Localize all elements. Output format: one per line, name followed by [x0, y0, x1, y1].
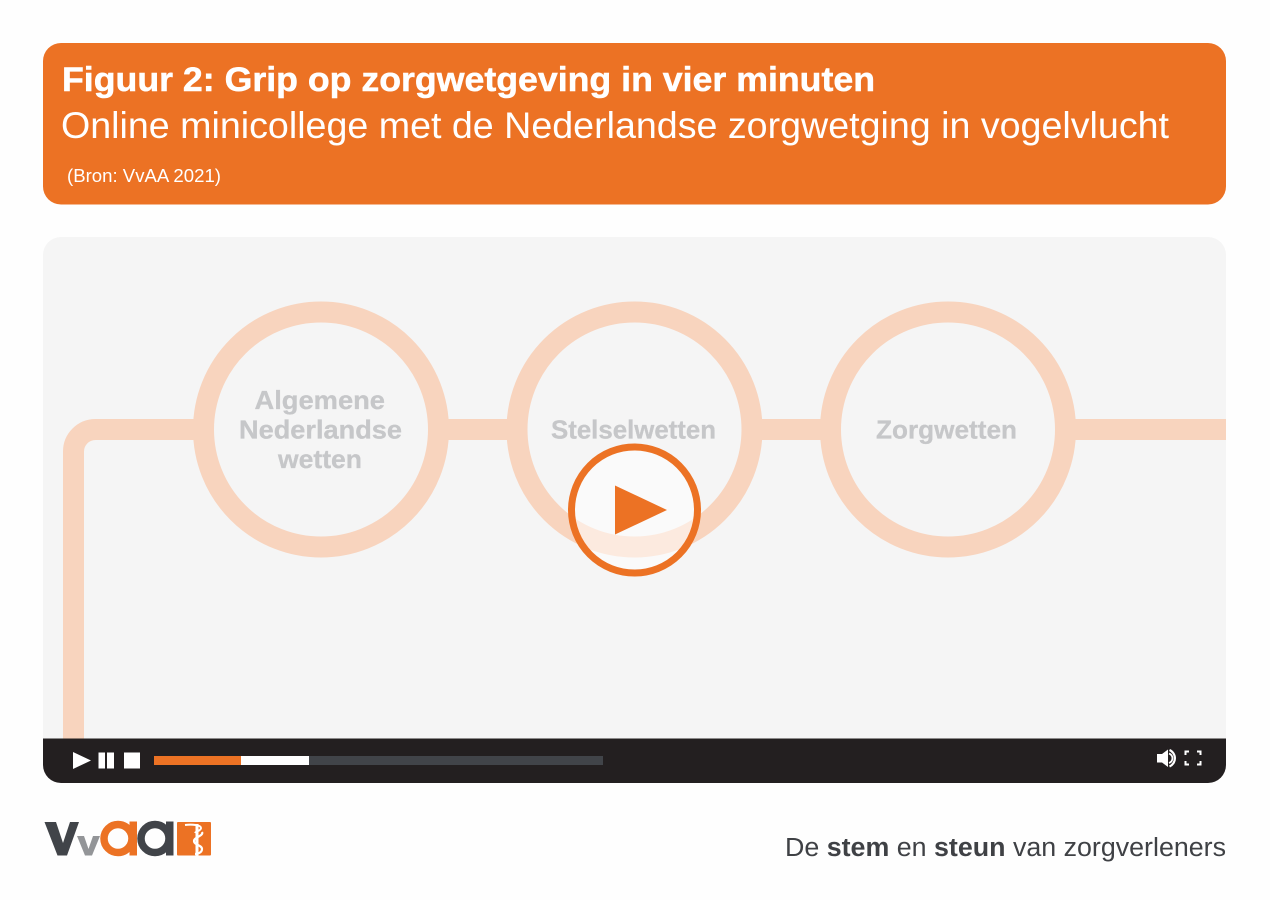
circle: Zorgwetten [830, 312, 1066, 547]
subtitle: Online minicollege met de Nederlandse zorgwetging in vogelvlucht [61, 105, 1170, 146]
title: Figuur 2: Grip op zorgwetgeving in vier minuten [62, 61, 875, 99]
logo: VvAA [44, 822, 211, 856]
icon: pause [98, 752, 114, 768]
icon: volume [1157, 750, 1175, 767]
header panel [43, 43, 1226, 204]
circle: Algemene Nederlandse wetten [204, 312, 438, 547]
icon: play triangle [615, 486, 667, 534]
progress bar [154, 756, 603, 765]
logo mark [177, 822, 211, 856]
circle: Stelselwetten: Stelselwetten [551, 414, 716, 444]
play button [572, 447, 698, 573]
icon: play [73, 752, 91, 769]
timeline line [74, 430, 1226, 739]
circle: Stelselwetten [517, 312, 752, 547]
circle: Algemene Nederlandse wetten: wetten [277, 444, 362, 474]
icon: fullscreen [1186, 752, 1200, 764]
icon: stop [124, 752, 140, 768]
video control bar [43, 738, 1226, 783]
circle: Algemene Nederlandse wetten: Nederlandse [239, 414, 402, 444]
video panel [43, 237, 1226, 739]
source note: (Bron: VvAA 2021) [67, 166, 221, 186]
circle: Algemene Nederlandse wetten: Algemene [254, 385, 385, 415]
circle: Zorgwetten: Zorgwetten [876, 414, 1017, 444]
tagline: De stem en steun van zorgverleners [785, 834, 1226, 862]
